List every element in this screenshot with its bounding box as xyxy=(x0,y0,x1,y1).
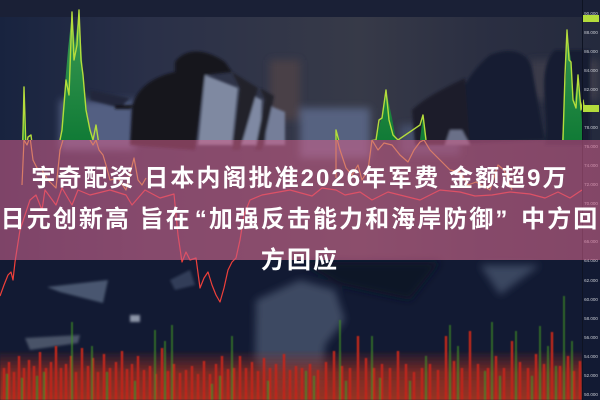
chart: right axis: 84.000 xyxy=(584,68,598,73)
chart: right axis: 52.000 xyxy=(584,373,598,378)
chart: right axis: 78.000 xyxy=(584,125,598,130)
chart: right axis: 72.000 xyxy=(584,182,598,187)
title: 宇奇配资 日本内阁批准2026年军费 金额超9万 xyxy=(31,165,569,192)
chart: right axis: 74.000 xyxy=(584,163,598,168)
chart: right axis xyxy=(582,0,599,400)
chart: green price fill xyxy=(22,20,582,140)
chart: right axis: 82.000 xyxy=(584,87,598,92)
photo: left seats and windows xyxy=(90,52,285,150)
chart: right axis: 56.000 xyxy=(584,335,598,340)
chart: right axis: 70.000 xyxy=(584,201,598,206)
chart: price line xyxy=(0,10,585,302)
chart: right axis: 58.000 xyxy=(584,316,598,321)
chart: right axis: 88.000 xyxy=(584,30,598,35)
title: 方回应 xyxy=(261,247,339,274)
title: 日元创新高 旨在“加强反击能力和海岸防御” 中方回 xyxy=(1,206,599,233)
chart: right axis: 62.000 xyxy=(584,278,598,283)
chart: right axis: 66.000 xyxy=(584,239,598,244)
chart: volume bars xyxy=(0,296,582,400)
chart: right axis: 50.000 xyxy=(584,392,598,397)
photo: lower cabin floor and seats xyxy=(255,262,540,400)
chart: right axis: 64.000 xyxy=(584,258,598,263)
photo: right seats xyxy=(412,50,590,145)
chart: right axis: 86.000 xyxy=(584,49,598,54)
title band xyxy=(0,140,600,260)
chart: right axis: 60.000 xyxy=(584,297,598,302)
chart: right axis: 76.000 xyxy=(584,144,598,149)
chart: right axis: 54.000 xyxy=(584,354,598,359)
chart: right axis: 90.000 xyxy=(584,11,598,16)
title xyxy=(1,165,599,274)
